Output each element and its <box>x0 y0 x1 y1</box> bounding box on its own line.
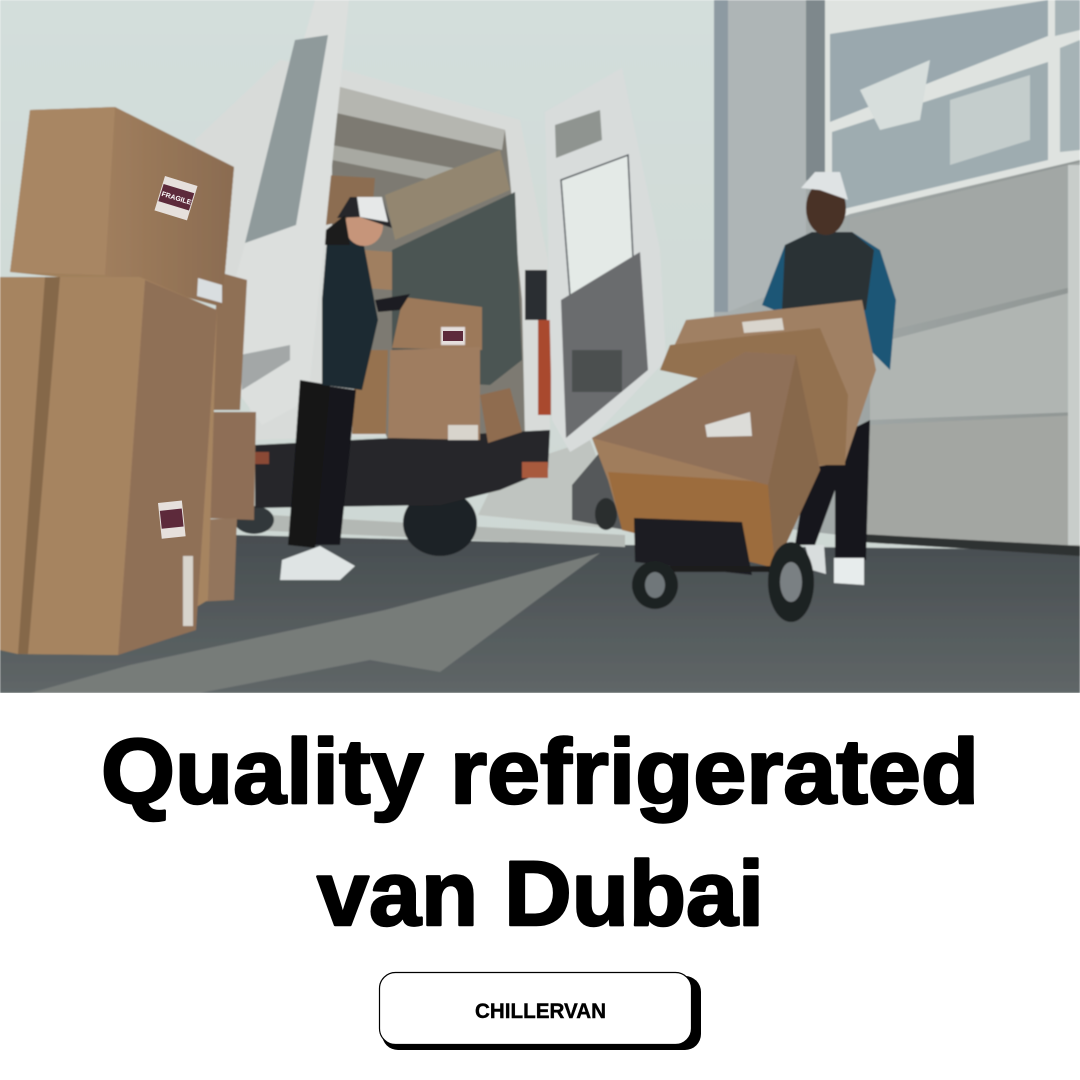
head <box>806 181 846 235</box>
man worker <box>762 172 896 585</box>
head and cap <box>344 216 384 248</box>
building <box>714 0 1080 556</box>
shoes <box>280 546 355 580</box>
van body <box>236 86 552 556</box>
button: CHILLERVAN <box>380 972 701 1050</box>
large bottom box <box>9 276 216 607</box>
fragile labels on boxes: FRAGILE <box>160 191 192 207</box>
stacked boxes left <box>0 107 256 655</box>
building windows <box>825 0 1080 225</box>
ground asphalt <box>0 515 1080 693</box>
top box on truck <box>670 300 876 467</box>
title: Quality refrigerated <box>101 721 979 823</box>
photo: delivery workers loading a van <box>0 0 1080 693</box>
truck base <box>634 518 752 575</box>
fragile labels on boxes <box>154 176 463 539</box>
woman worker with tablet <box>280 197 410 580</box>
jacket <box>762 232 896 370</box>
title <box>101 721 979 945</box>
tablet <box>375 294 410 312</box>
van cargo interior <box>332 85 525 445</box>
wheels <box>632 561 678 609</box>
main box on truck <box>592 437 752 514</box>
legs <box>314 384 357 546</box>
legs <box>795 420 870 560</box>
title: van Dubai <box>317 843 764 945</box>
building panels <box>936 162 1080 318</box>
van right open door <box>548 110 649 452</box>
fence and car behind <box>478 440 625 530</box>
hand truck with boxes <box>592 300 876 622</box>
van bumper and underside <box>255 430 550 508</box>
van wheels <box>403 490 477 556</box>
button: CHILLERVAN: CHILLERVAN <box>475 1000 606 1023</box>
jacket <box>322 235 378 390</box>
small rear boxes <box>210 272 247 410</box>
boxes inside van <box>352 250 522 443</box>
van left open door <box>240 1 348 405</box>
top box <box>12 110 116 278</box>
sky background <box>0 0 958 550</box>
